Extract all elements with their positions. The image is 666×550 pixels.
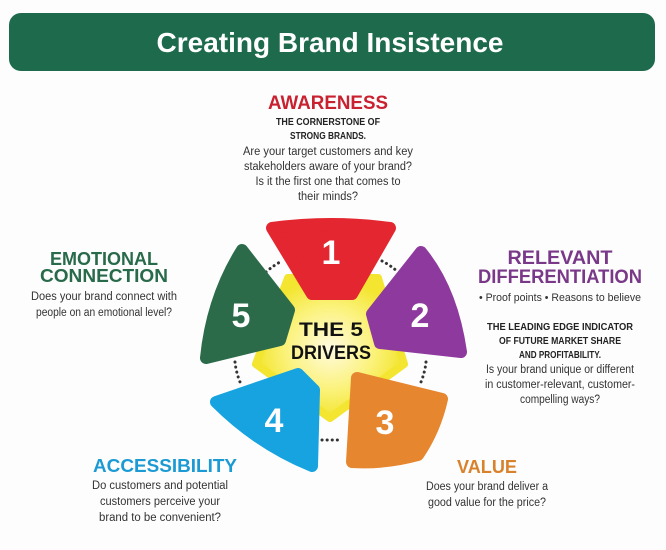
accessibility text block	[92, 456, 237, 524]
accessibility text block: brand to be convenient?	[99, 512, 221, 524]
relevant differentiation text block: DIFFERENTIATION	[478, 267, 642, 288]
accessibility text block: Do customers and potential	[92, 480, 228, 492]
segment 5: green: 5	[232, 297, 250, 335]
title banner: Creating Brand Insistence	[157, 27, 503, 58]
emotional connection text block: CONNECTION	[40, 266, 168, 286]
awareness text block: THE CORNERSTONE OF	[276, 116, 380, 128]
awareness text block: AWARENESS	[268, 93, 388, 114]
emotional connection text block: EMOTIONAL	[50, 249, 158, 269]
segment 5: green	[206, 250, 289, 358]
segment 2: purple	[372, 252, 461, 352]
relevant differentiation text block: OF FUTURE MARKET SHARE	[499, 335, 621, 347]
awareness text block: their minds?	[298, 191, 358, 203]
relevant differentiation text block: AND PROFITABILITY.	[519, 349, 601, 361]
value text block: Does your brand deliver a	[426, 481, 549, 493]
relevant differentiation text block: THE LEADING EDGE INDICATOR	[487, 321, 633, 333]
center pentagon: the 5 drivers	[256, 278, 404, 418]
emotional connection text block	[31, 249, 177, 319]
accessibility text block: ACCESSIBILITY	[93, 456, 237, 476]
relevant differentiation text block: • Proof points • Reasons to believe	[479, 292, 641, 304]
relevant differentiation text block	[478, 248, 642, 406]
emotional connection text block: people on an emotional level?	[36, 307, 172, 319]
segment 1: red	[272, 224, 390, 294]
awareness text block: Is it the first one that comes to	[256, 176, 400, 188]
emotional connection text block: Does your brand connect with	[31, 291, 177, 303]
awareness text block: STRONG BRANDS.	[290, 130, 366, 142]
title banner	[9, 13, 655, 71]
relevant differentiation text block: compelling ways?	[520, 394, 600, 406]
accessibility text block: customers perceive your	[100, 496, 220, 508]
segment 1: red: 1	[322, 234, 340, 272]
awareness text block: stakeholders aware of your brand?	[244, 161, 412, 173]
center pentagon: the 5 drivers: THE 5	[299, 320, 363, 341]
relevant differentiation text block: Is your brand unique or different	[486, 364, 635, 376]
center pentagon: the 5 drivers: DRIVERS	[291, 343, 371, 364]
awareness text block	[243, 93, 413, 203]
segment 2: purple: 2	[411, 297, 429, 335]
value text block	[426, 457, 549, 509]
relevant differentiation text block: RELEVANT	[508, 248, 613, 269]
segment 3: orange	[352, 378, 442, 462]
relevant differentiation text block: in customer-relevant, customer-	[485, 379, 635, 391]
segment 4: blue: 4	[265, 402, 284, 440]
value text block: good value for the price?	[428, 497, 546, 509]
value text block: VALUE	[457, 457, 517, 477]
dotted connectors	[235, 261, 426, 440]
awareness text block: Are your target customers and key	[243, 146, 413, 158]
segment 4: blue	[216, 374, 314, 466]
segment 3: orange: 3	[376, 404, 394, 442]
